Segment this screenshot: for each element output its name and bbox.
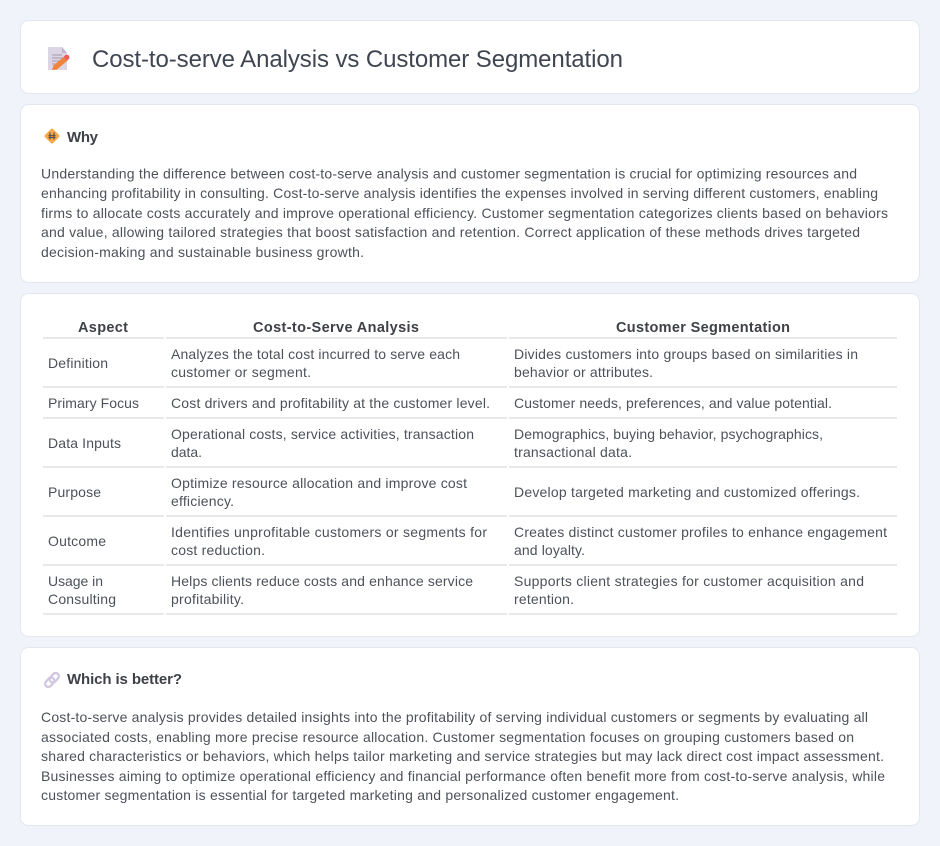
table header [78,320,790,336]
row: outcome: Creates distinct customer profiles to enhance engagement [514,524,887,540]
row: purpose: Optimize resource allocation and improve cost [171,475,467,491]
row: usage in consulting: Consulting [48,591,116,607]
row: usage in consulting: profitability. [171,591,244,607]
row: primary focus: Cost drivers and profitability at the customer level. [171,395,490,411]
table header: Aspect [78,320,128,336]
text block: why: decision-making and sustainable business growth. [41,244,364,260]
row: purpose: Develop targeted marketing and customized offerings. [514,484,860,500]
row: outcome: Outcome [48,533,106,549]
row: primary focus: Primary Focus [48,395,139,411]
text block: which is better: associated costs, enabling more precise resource allocation. Customer segmentation focuses on grouping customers based on [41,729,854,745]
row: usage in consulting [48,573,864,607]
row: usage in consulting: Helps clients reduce costs and enhance service [171,573,473,589]
text block: why: and value, allowing tailored strategies that boost satisfaction and retention. Correct application of these methods drives targeted [41,224,860,240]
heading: which is better: Which is better? [67,671,182,688]
text block: which is better: customer segmentation is essential for targeted marketing and personalized customer engagement. [41,787,679,803]
panel: comparison table [20,294,920,636]
row: outcome: Identifies unprofitable customers or segments for [171,524,487,540]
table header: Customer Segmentation [616,320,790,336]
row: data inputs: Data Inputs [48,435,121,451]
row: outcome: cost reduction. [171,542,265,558]
text block: which is better: Cost-to-serve analysis provides detailed insights into the profitability of serving individual customers or segments by evaluating all [41,709,868,725]
row: primary focus: Customer needs, preferences, and value potential. [514,395,832,411]
row: definition: behavior or attributes. [514,364,653,380]
row: data inputs: Demographics, buying behavior, psychographics, [514,426,823,442]
row: data inputs [48,426,823,460]
row: primary focus [48,395,832,411]
row: purpose: efficiency. [171,493,234,509]
row: data inputs: data. [171,444,202,460]
text block: why: Understanding the difference between cost-to-serve analysis and customer segmentation is crucial for optimizing resources and [41,166,857,182]
icon: orange diamond sign [44,128,60,144]
row: outcome: and loyalty. [514,542,585,558]
text block: which is better [41,709,885,803]
panel: which is better [20,648,920,826]
row: purpose: Purpose [48,484,101,500]
row: definition: Analyzes the total cost incurred to serve each [171,346,460,362]
row: definition [48,346,858,380]
text block: which is better: Businesses aiming to optimize operational efficiency and financial performance often benefit more from cost-to-serve analysis, while [41,768,885,784]
text block: why: enhancing profitability in consulting. Cost-to-serve analysis identifies the expenses involved in serving different customers, enabling [41,185,878,201]
row: definition: customer or segment. [171,364,311,380]
icon: document with pencil [48,47,70,70]
row: usage in consulting: Usage in [48,573,103,589]
panel: why [20,104,920,282]
row: purpose [48,475,860,509]
row: data inputs: transactional data. [514,444,632,460]
icon: link [44,672,60,688]
text block: which is better: shared characteristics or behaviors, which helps tailor marketing and service strategies but may lack direct cost impact assessment. [41,748,884,764]
panel: title header [20,20,920,94]
text block: why: firms to allocate costs accurately and improve operational efficiency. Customer segmentation categorizes clients based on behaviors [41,205,888,221]
text block: why [41,166,888,260]
row: usage in consulting: retention. [514,591,574,607]
row: definition: Divides customers into groups based on similarities in [514,346,858,362]
row: data inputs: Operational costs, service activities, transaction [171,426,474,442]
heading: why: Why [67,129,99,146]
table header: Cost-to-Serve Analysis [253,320,419,336]
row: usage in consulting: Supports client strategies for customer acquisition and [514,573,864,589]
row: outcome [48,524,887,558]
row: definition: Definition [48,355,108,371]
title: Cost-to-serve Analysis vs Customer Segmentation [92,46,623,73]
